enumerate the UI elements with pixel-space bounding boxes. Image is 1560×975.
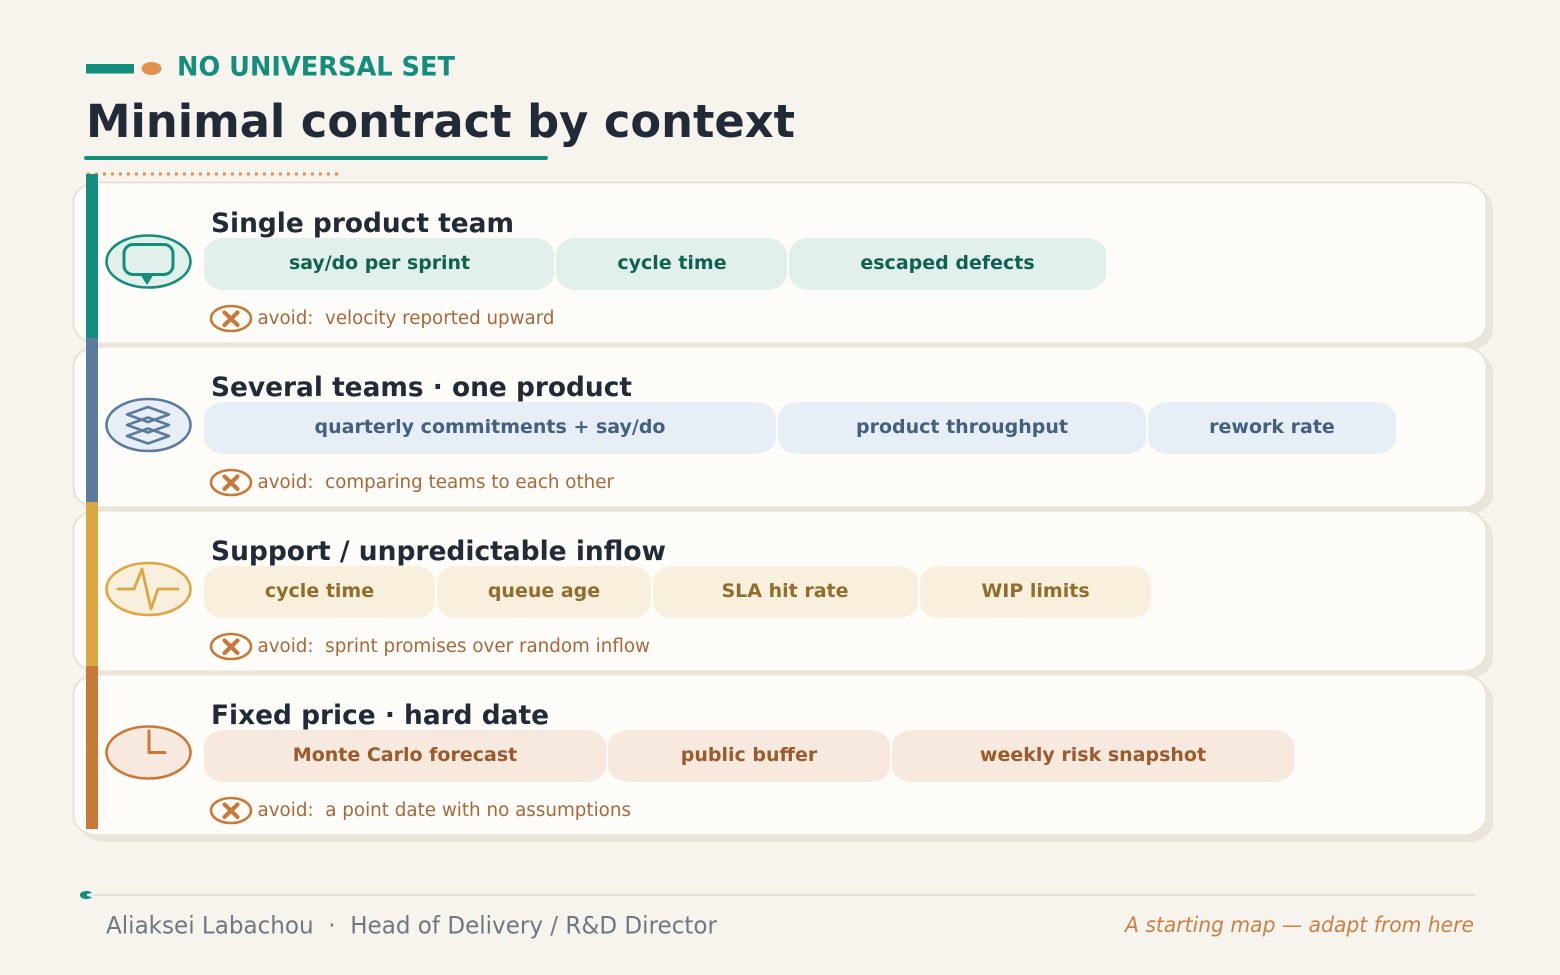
metric pill: escaped defects: escaped defects <box>860 252 1035 274</box>
metric pill: cycle time: cycle time <box>265 580 374 602</box>
metric pill: product throughput <box>778 402 1146 454</box>
panel: several teams <box>74 338 1493 514</box>
panel: fixed price <box>74 666 1493 842</box>
metric pill: Monte Carlo forecast <box>204 730 606 782</box>
metric pill: SLA hit rate: SLA hit rate <box>721 580 849 602</box>
eyebrow label: NO UNIVERSAL SET <box>177 52 455 82</box>
metric pill: public buffer <box>608 730 890 782</box>
header accent: bar and dot <box>86 62 162 75</box>
card <box>74 510 1486 672</box>
icon: clock <box>106 726 190 778</box>
metric pill: rework rate: rework rate <box>1209 416 1335 438</box>
card <box>74 346 1486 508</box>
metric pill: cycle time <box>204 566 435 618</box>
footer author: Aliaksei Labachou · Head of Delivery / R&D Director <box>106 912 717 940</box>
card <box>74 674 1486 836</box>
avoid note: avoid: a point date with no assumptions <box>258 800 631 821</box>
metric pill: say/do per sprint: say/do per sprint <box>289 252 470 274</box>
footer rule with dot <box>80 891 1475 899</box>
dotted rule <box>87 172 343 176</box>
avoid note: avoid: comparing teams to each other <box>258 472 614 493</box>
metric pill: cycle time <box>556 238 787 290</box>
metric pill: rework rate <box>1148 402 1396 454</box>
metric pill: quarterly commitments: quarterly commitments + say/do <box>315 416 665 438</box>
heading: Single product team <box>211 208 514 239</box>
metric pill: product throughput: product throughput <box>856 416 1068 438</box>
card shadow <box>80 188 1493 350</box>
icon: speech bubble <box>106 236 190 288</box>
metric pill: queue age: queue age <box>488 580 600 602</box>
icon: pulse line <box>106 563 190 615</box>
panel: support <box>74 502 1493 678</box>
metric pill: quarterly commitments <box>204 402 776 454</box>
colour stripe <box>86 502 98 666</box>
card <box>74 182 1486 344</box>
footer note: A starting map — adapt from here <box>1123 913 1474 937</box>
colour stripe <box>86 338 98 502</box>
title underline <box>84 156 548 160</box>
card shadow <box>80 516 1493 678</box>
metric pill: say/do per sprint <box>204 238 554 290</box>
colour stripe <box>86 666 98 829</box>
colour stripe <box>86 174 98 338</box>
avoid note: avoid: sprint promises over random inflow <box>258 636 650 657</box>
metric pill: public buffer: public buffer <box>681 744 818 766</box>
heading: Several teams · one product <box>211 372 632 403</box>
card shadow <box>80 352 1493 514</box>
metric pill: weekly risk snapshot <box>892 730 1294 782</box>
metric pill: Monte Carlo forecast: Monte Carlo forecast <box>293 744 517 766</box>
heading: Fixed price · hard date <box>211 700 549 731</box>
metric pill: cycle time: cycle time <box>617 252 727 274</box>
metric pill: SLA hit rate <box>653 566 918 618</box>
metric pill: queue age <box>437 566 651 618</box>
icon: stacked layers <box>106 399 190 451</box>
heading: Support / unpredictable inflow <box>211 536 666 567</box>
title: Minimal contract by context <box>86 95 795 148</box>
metric pill: WIP limits: WIP limits <box>981 580 1090 602</box>
avoid note: avoid: velocity reported upward <box>258 308 554 329</box>
panel: single product team <box>74 174 1493 350</box>
card shadow <box>80 680 1493 842</box>
metric pill: WIP limits <box>920 566 1151 618</box>
metric pill: escaped defects <box>789 238 1106 290</box>
metric pill: weekly risk snapshot: weekly risk snapshot <box>980 744 1206 766</box>
